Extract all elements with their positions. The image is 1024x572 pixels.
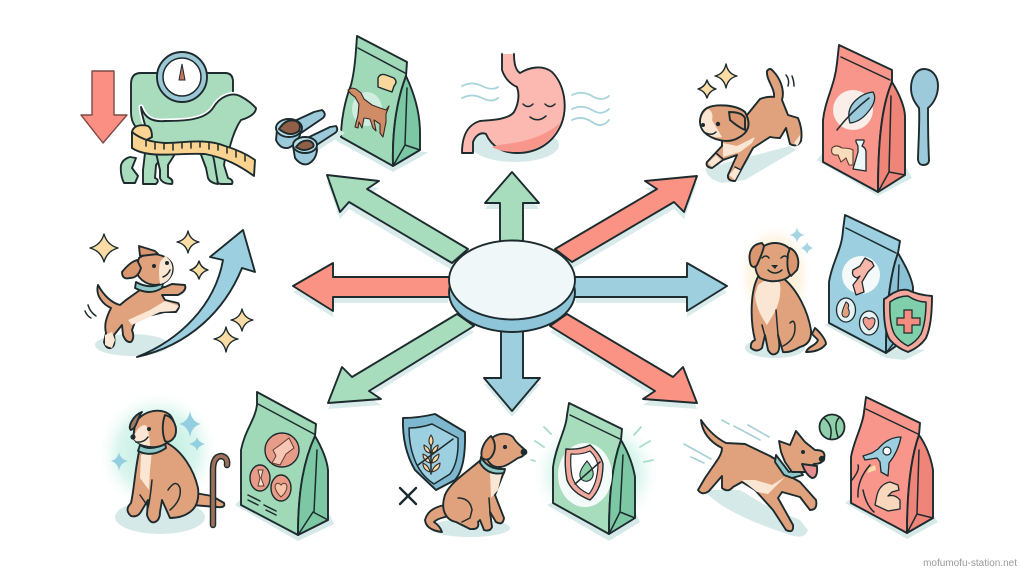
panel: senior dog with cane bbox=[96, 390, 227, 534]
panel: running dog with ball bbox=[684, 414, 844, 537]
shadow bbox=[706, 146, 796, 183]
panel: jumping dog with rising arrow bbox=[85, 230, 255, 357]
wheat bbox=[423, 435, 440, 472]
icon: down arrow bbox=[81, 71, 127, 143]
panel: happy dog and joint bag bbox=[737, 215, 932, 360]
shadow bbox=[547, 500, 640, 541]
swoosh lines bbox=[852, 465, 874, 512]
panel: measured food bag green bbox=[276, 36, 428, 172]
arrow: up-right red bbox=[555, 176, 697, 262]
icon: spoon bbox=[911, 69, 938, 165]
arrow: up green bbox=[485, 172, 539, 245]
puppy bbox=[700, 69, 802, 181]
red bag with feather bbox=[817, 45, 912, 196]
glow bbox=[96, 390, 220, 514]
shadow bbox=[704, 490, 808, 537]
shadow bbox=[745, 338, 805, 358]
waves left bbox=[462, 84, 498, 100]
glow bbox=[737, 223, 813, 327]
rising arrow bbox=[137, 230, 255, 357]
dog on bag bbox=[348, 88, 389, 137]
icon: ball bbox=[820, 414, 844, 440]
shadow bbox=[335, 125, 428, 172]
sparkles bbox=[698, 64, 737, 98]
sparkles bbox=[789, 227, 813, 254]
icon: broken piece bbox=[121, 157, 138, 183]
arrow: left red bbox=[293, 263, 455, 311]
white circle bbox=[352, 92, 382, 126]
treat icon bbox=[378, 74, 396, 92]
arrow: up-left green bbox=[327, 175, 468, 263]
icon: shield with drop bbox=[565, 445, 603, 500]
rays bbox=[531, 427, 653, 462]
shadow bbox=[235, 495, 334, 541]
sitting senior dog bbox=[128, 411, 224, 522]
sitting dog bbox=[425, 434, 527, 532]
icon: rocket bbox=[863, 437, 901, 476]
bag bbox=[851, 397, 920, 533]
shadow bbox=[95, 334, 169, 356]
arrow: down-right red bbox=[550, 314, 697, 403]
central hub with arrows bbox=[293, 172, 727, 417]
white glow bbox=[558, 443, 612, 507]
icon: scale bbox=[131, 52, 233, 130]
arrow: down-left green bbox=[328, 314, 474, 403]
panel: shield allergy bag bbox=[530, 403, 662, 541]
panel: puppy and red bag bbox=[698, 45, 938, 196]
arrow: right blue bbox=[570, 263, 727, 311]
disc side bbox=[449, 253, 575, 332]
icon: dog silhouette bbox=[141, 94, 256, 184]
arrow shadows bbox=[293, 178, 727, 417]
shadow bbox=[845, 495, 938, 539]
bone circle bbox=[250, 465, 270, 491]
icon: x mark bbox=[400, 488, 416, 504]
icon: tape measure bbox=[132, 125, 255, 176]
arrow: down blue bbox=[484, 325, 540, 411]
scoop large bbox=[276, 110, 325, 148]
shadow bbox=[115, 500, 205, 534]
sparkles bbox=[111, 411, 205, 471]
heart circle bbox=[271, 475, 291, 501]
dog bbox=[698, 420, 825, 531]
glow bbox=[530, 413, 662, 533]
icon: cane bbox=[213, 456, 227, 525]
icon: health shield bbox=[884, 290, 932, 352]
icon: grain shield bbox=[403, 414, 465, 490]
watermark: mofumofu-station.net bbox=[923, 558, 1017, 569]
waves right bbox=[572, 93, 609, 125]
disc top bbox=[449, 240, 575, 320]
panel: energy bag with rocket bbox=[845, 397, 938, 539]
panel: calm stomach bbox=[462, 54, 609, 162]
shadow bbox=[471, 128, 559, 162]
shadow bbox=[430, 519, 510, 537]
jumping dog bbox=[85, 246, 185, 348]
stomach face bbox=[523, 104, 555, 120]
stomach bbox=[462, 54, 565, 153]
panel: joint care bag green bbox=[235, 392, 334, 541]
joint circle bbox=[265, 433, 299, 467]
bag bbox=[241, 392, 316, 535]
panel: grain free dog and shield bbox=[400, 414, 527, 537]
speed lines bbox=[684, 420, 769, 463]
panel: weight loss scale dog bbox=[81, 52, 256, 184]
scoop small bbox=[293, 126, 345, 164]
sitting dog bbox=[750, 243, 826, 354]
bag bbox=[341, 36, 407, 166]
blue bag bbox=[825, 215, 925, 360]
icon: arm bbox=[875, 482, 900, 511]
sparkles bbox=[90, 231, 253, 352]
bag bbox=[553, 403, 622, 534]
stomach inner shade bbox=[492, 123, 560, 152]
